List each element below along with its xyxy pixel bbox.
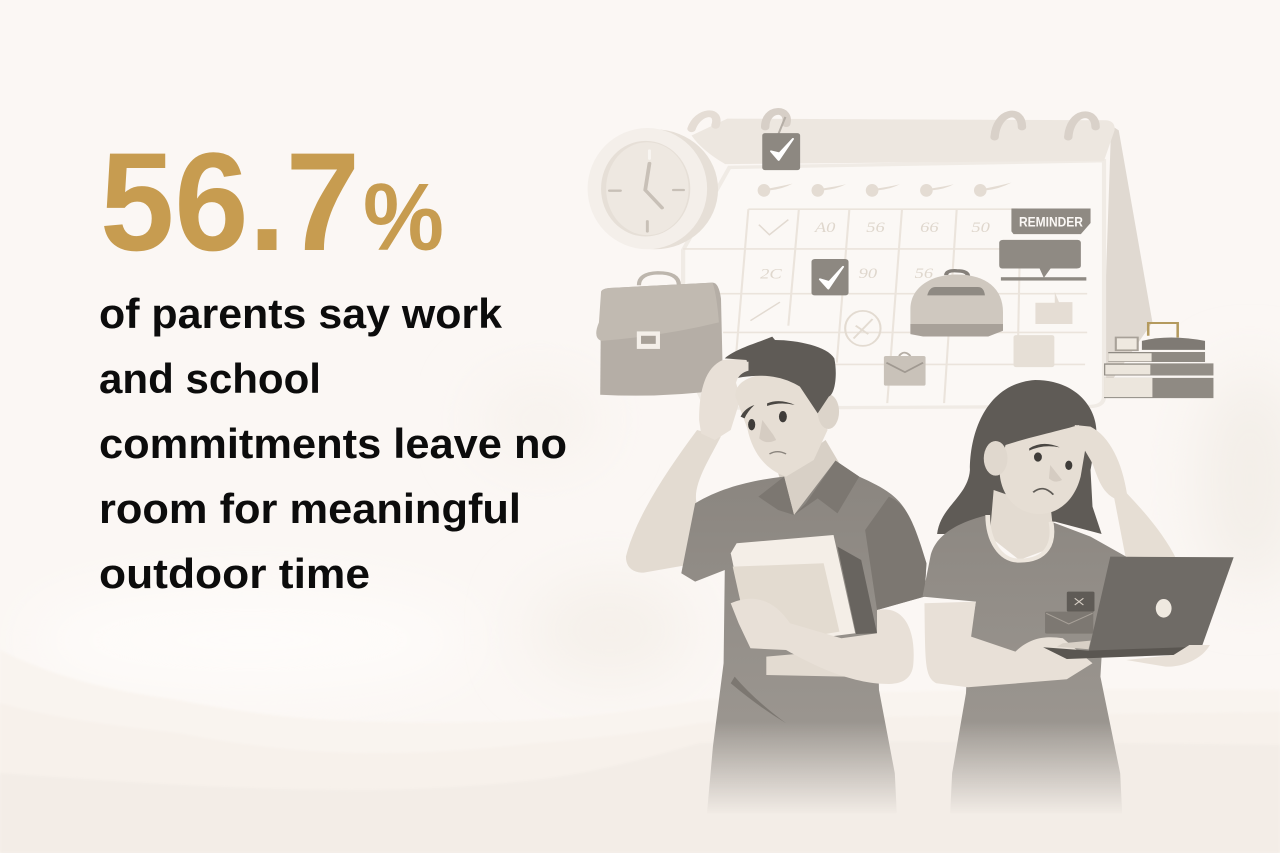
description text: commitments leave no — [99, 420, 567, 467]
statistic: 56.7%: % — [363, 164, 444, 271]
man's facial features — [741, 401, 795, 454]
man's neck — [778, 440, 839, 515]
man's shirt fold — [731, 677, 786, 723]
man's folded forearm — [731, 599, 914, 684]
man's raised arm — [626, 430, 721, 573]
reminder note board — [999, 240, 1086, 281]
card and envelope — [1045, 592, 1094, 634]
stack of books and small iron — [1104, 323, 1213, 398]
calendar handwritten dates: 56 — [866, 219, 885, 236]
woman's raised arm — [1075, 425, 1177, 560]
woman's facial features — [1029, 444, 1072, 495]
calendar header band — [692, 119, 1115, 164]
suitcase icon — [910, 271, 1003, 336]
illustration: desk calendar scene — [588, 111, 1213, 408]
description text: room for meaningful — [99, 485, 521, 532]
papers held by man — [731, 535, 877, 677]
woman's hair back — [937, 380, 1102, 534]
calendar handwritten dates: 50 — [971, 219, 991, 236]
man's hand at head — [699, 358, 751, 440]
description text: outdoor time — [99, 550, 370, 597]
woman's neck — [990, 490, 1055, 560]
illustration: two stressed parents — [626, 337, 1234, 813]
calendar handwritten dates: 56 — [915, 265, 934, 281]
reminder label — [1011, 209, 1091, 234]
man's face — [735, 372, 828, 477]
calendar rings — [692, 111, 1096, 137]
calendar date dots — [758, 183, 1011, 197]
description text: of parents say work — [99, 290, 503, 337]
calendar handwritten dates: 66 — [920, 219, 939, 236]
calendar handwritten dates: A0 — [814, 219, 836, 236]
calendar page — [683, 161, 1104, 408]
sticky note — [1014, 335, 1054, 367]
large briefcase — [596, 273, 723, 396]
calendar stand leg — [1102, 125, 1152, 395]
man's shirt — [681, 461, 926, 813]
man's fingers in hair — [725, 362, 748, 382]
small notepad — [1035, 292, 1072, 324]
calendar handwritten dates: 2C — [760, 265, 783, 282]
woman's ear — [984, 441, 1007, 476]
woman's collar — [988, 515, 1052, 561]
man's sleeve shadow — [865, 497, 926, 610]
small briefcase icon — [884, 353, 926, 386]
description text — [99, 290, 567, 597]
wall clock — [588, 128, 718, 249]
description text: and school — [99, 355, 321, 402]
man — [626, 337, 926, 813]
calendar grid — [683, 209, 1087, 403]
calendar handwritten dates — [760, 219, 991, 282]
woman — [922, 380, 1234, 813]
man's collar — [758, 461, 859, 515]
check mark tag on header — [762, 117, 800, 170]
calendar handwritten dates: 90 — [859, 265, 878, 281]
crossed clock icon — [845, 311, 881, 346]
statistic: 56.7%: 56.7 — [100, 123, 360, 280]
woman's forearm and hand — [924, 602, 1093, 687]
laptop — [1043, 557, 1234, 659]
woman's shirt — [922, 515, 1126, 813]
calendar scribbles — [750, 220, 788, 321]
reminder label: REMINDER — [1019, 215, 1083, 230]
check mark tile — [811, 259, 849, 295]
woman's face — [1000, 425, 1087, 514]
man's hair — [725, 337, 836, 413]
man's ear — [818, 394, 839, 429]
woman's right hand under laptop — [1126, 645, 1210, 667]
